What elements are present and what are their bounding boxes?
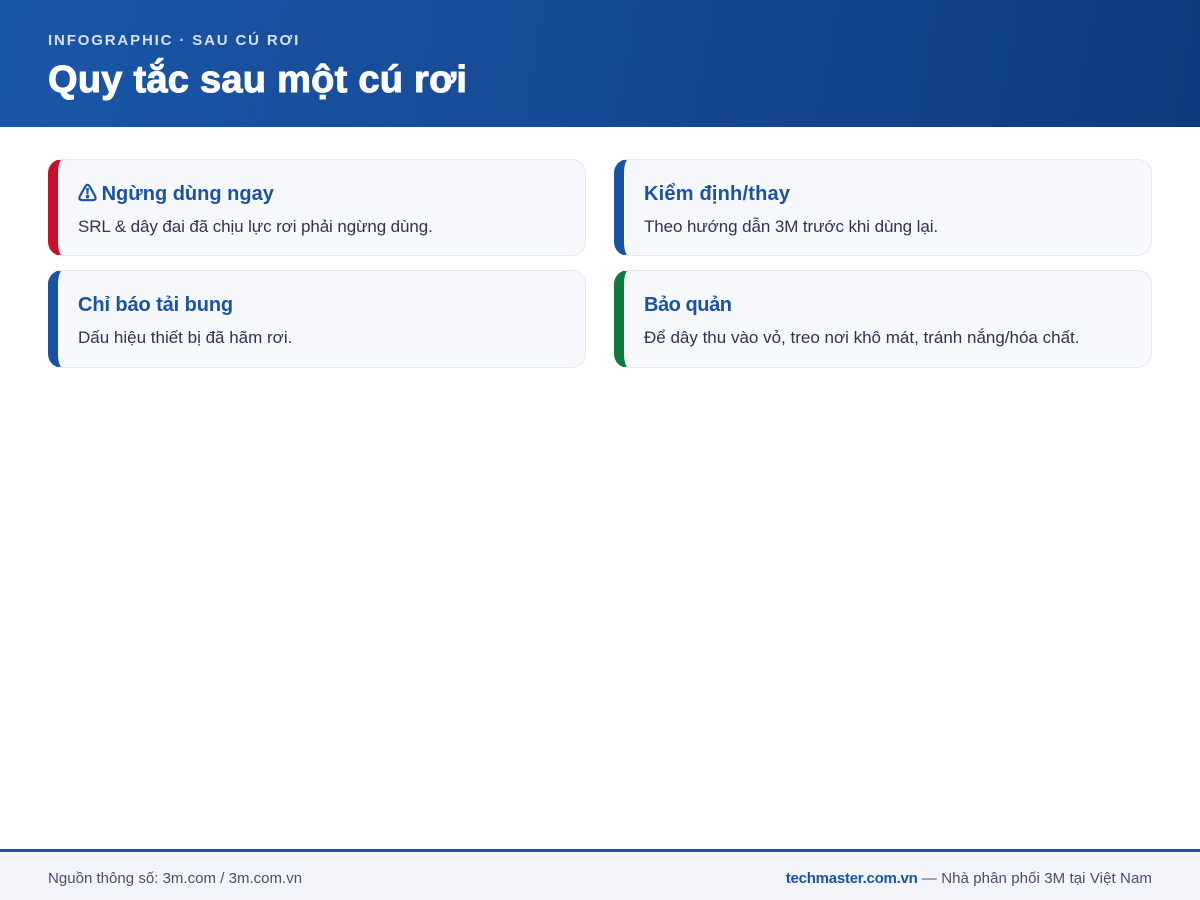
text: inspect: Theo hướng dẫn 3M trước khi dùng lại.	[644, 217, 938, 236]
panel: load indicator	[48, 270, 586, 368]
heading: storage: Bảo quản	[644, 294, 732, 316]
footer	[0, 849, 1200, 900]
distributor note: techmaster.com.vn — Nhà phân phối 3M tại Việt Nam	[786, 870, 1152, 887]
panel: stop using immediately	[48, 159, 586, 256]
text: load indicator: Dấu hiệu thiết bị đã hãm rơi.	[78, 328, 292, 347]
title: Quy tắc sau một cú rơi	[48, 59, 467, 101]
text: storage: Để dây thu vào vỏ, treo nơi khô mát, tránh nắng/hóa chất.	[644, 328, 1079, 347]
text: stop using: SRL & dây đai đã chịu lực rơi phải ngừng dùng.	[78, 217, 433, 236]
panel: storage	[614, 270, 1152, 368]
heading: load indicator: Chỉ báo tải bung	[78, 294, 233, 316]
heading: inspect: Kiểm định/thay	[644, 183, 790, 205]
panel: inspect or replace	[614, 159, 1152, 256]
heading: stop using: ⚠ Ngừng dùng ngay	[78, 183, 274, 205]
header banner	[0, 0, 1200, 127]
eyebrow label: INFOGRAPHIC · SAU CÚ RƠI	[48, 32, 300, 49]
source note: Nguồn thông số: 3m.com / 3m.com.vn	[48, 870, 302, 887]
